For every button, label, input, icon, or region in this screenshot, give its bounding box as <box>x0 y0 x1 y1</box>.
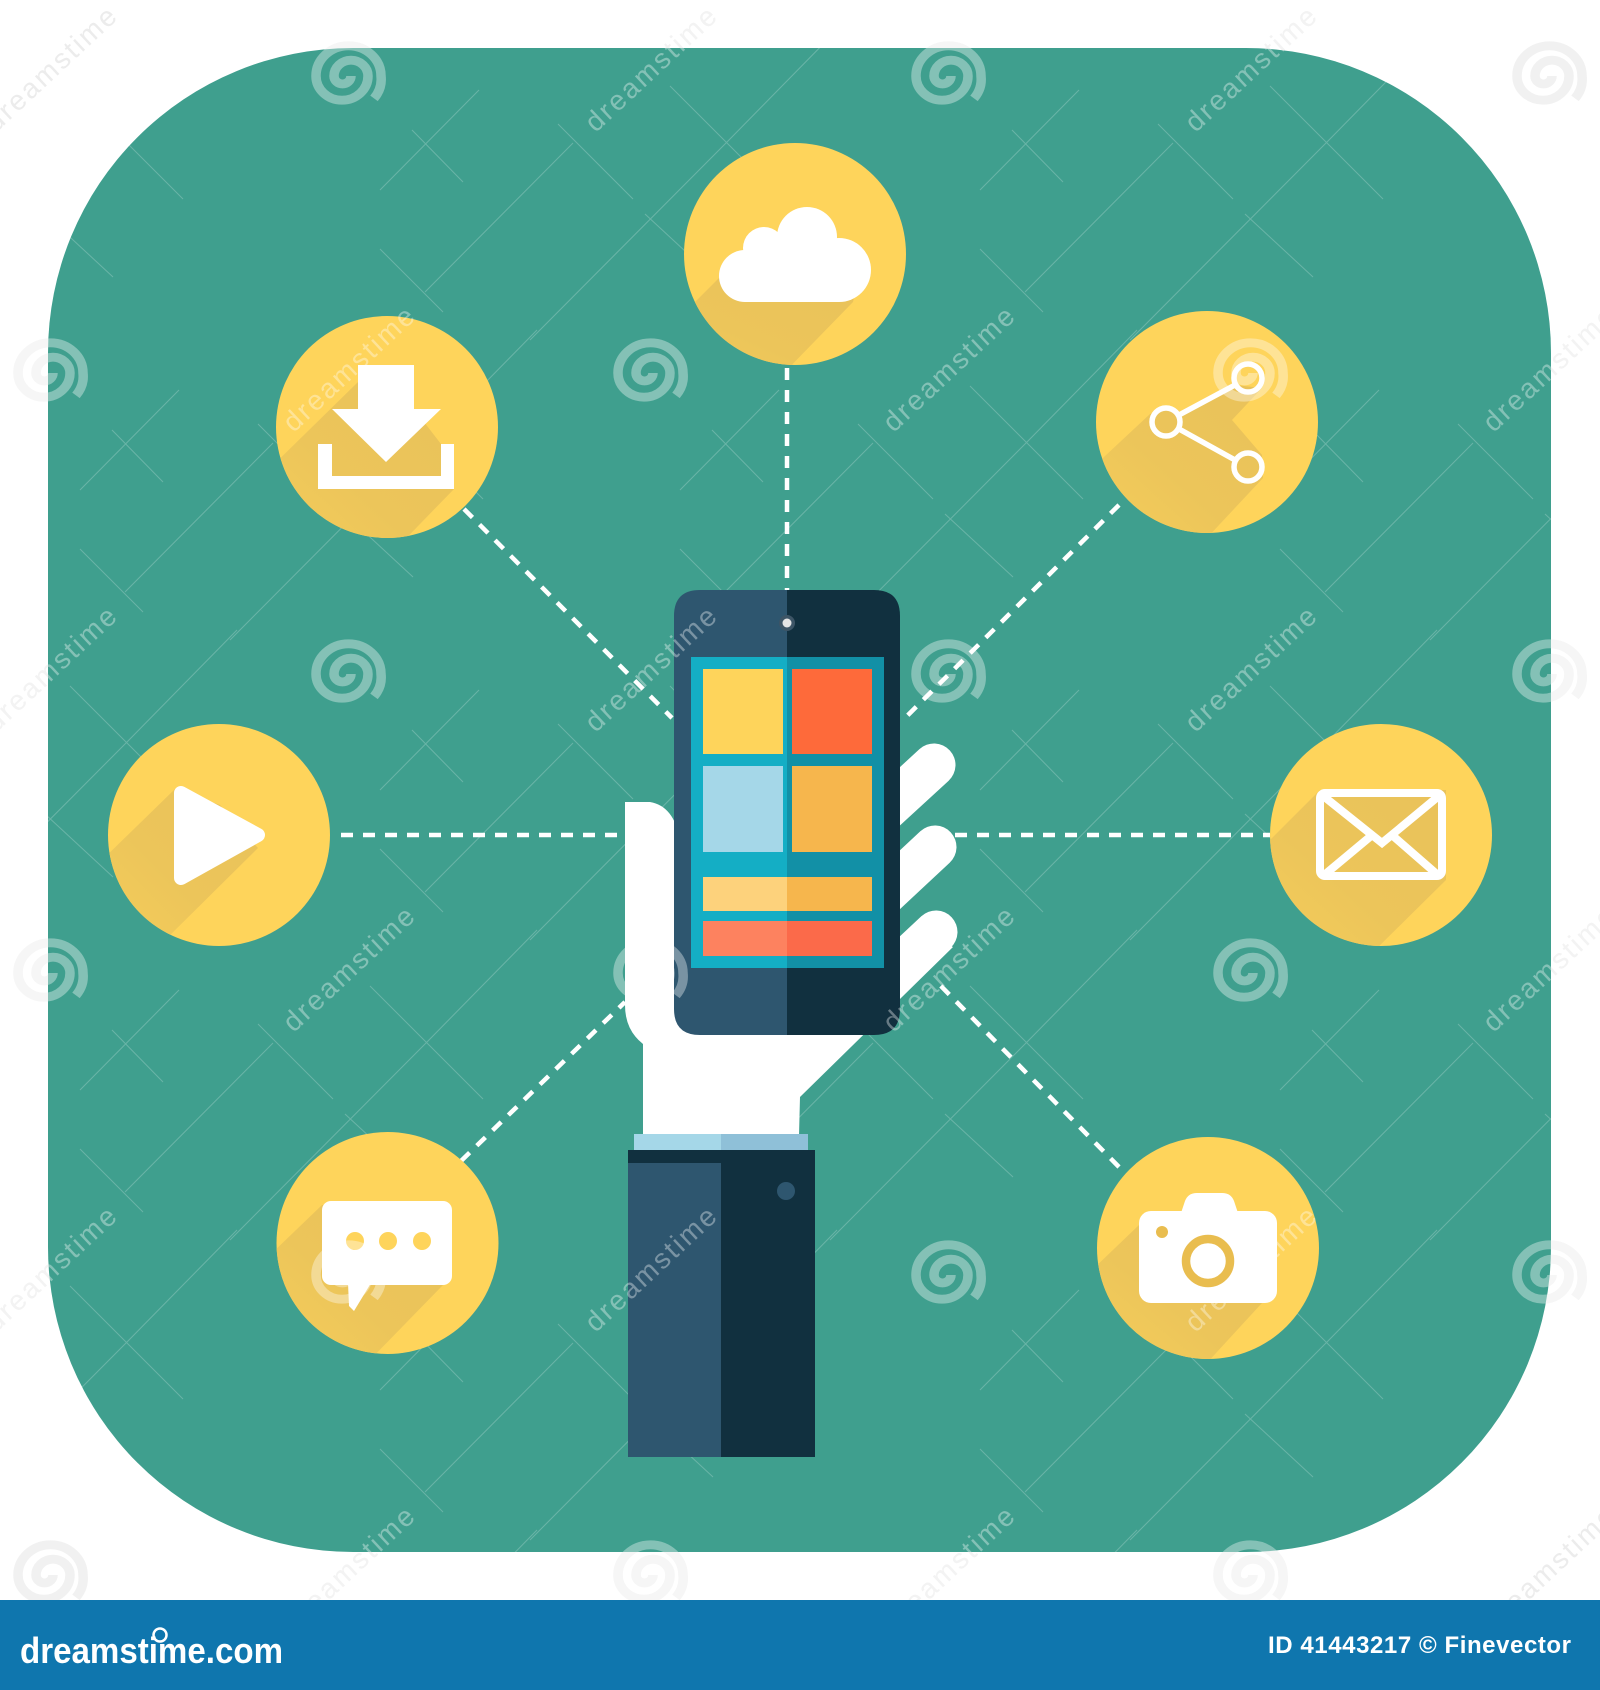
shirt cuff <box>634 1134 808 1151</box>
watermark text: dreamstime <box>277 1500 421 1638</box>
footer credit: ID 41443217 © Finevector <box>1268 1632 1571 1659</box>
icon: download <box>276 316 498 538</box>
footer logo: dreamstime.com <box>20 1630 283 1671</box>
icon: cloud <box>684 143 906 365</box>
watermark text: dreamstime <box>1179 1200 1323 1338</box>
faint watermark on white margin: dreamstime <box>1179 0 1323 138</box>
faint watermark on white margin: dreamstime <box>579 0 723 138</box>
watermark text: dreamstime <box>1179 600 1323 738</box>
dashed connector lines <box>341 368 1270 1167</box>
icon: play <box>100 724 330 950</box>
smartphone <box>674 590 900 1035</box>
watermark text: dreamstime <box>579 0 723 138</box>
icon: envelope <box>1270 724 1492 946</box>
faint watermark on white margin: dreamstime <box>877 1500 1021 1638</box>
suit sleeve <box>628 1150 815 1457</box>
watermark text: dreamstime <box>579 600 723 738</box>
icon: share <box>1090 311 1318 540</box>
phone screen <box>691 657 884 968</box>
hand <box>625 765 953 1136</box>
watermark text: dreamstime <box>1179 0 1323 138</box>
watermark text: dreamstime <box>579 1200 723 1338</box>
faint watermark on white margin: dreamstime <box>277 1500 421 1638</box>
watermark text: dreamstime <box>277 900 421 1038</box>
footer bar <box>0 1600 1600 1690</box>
icon: camera <box>1090 1137 1319 1365</box>
watermark text: dreamstime <box>877 1500 1021 1638</box>
watermark text: dreamstime <box>877 900 1021 1038</box>
watermark text: dreamstime <box>277 300 421 438</box>
watermark text: dreamstime <box>877 300 1021 438</box>
icon: chat bubble <box>270 1132 498 1365</box>
